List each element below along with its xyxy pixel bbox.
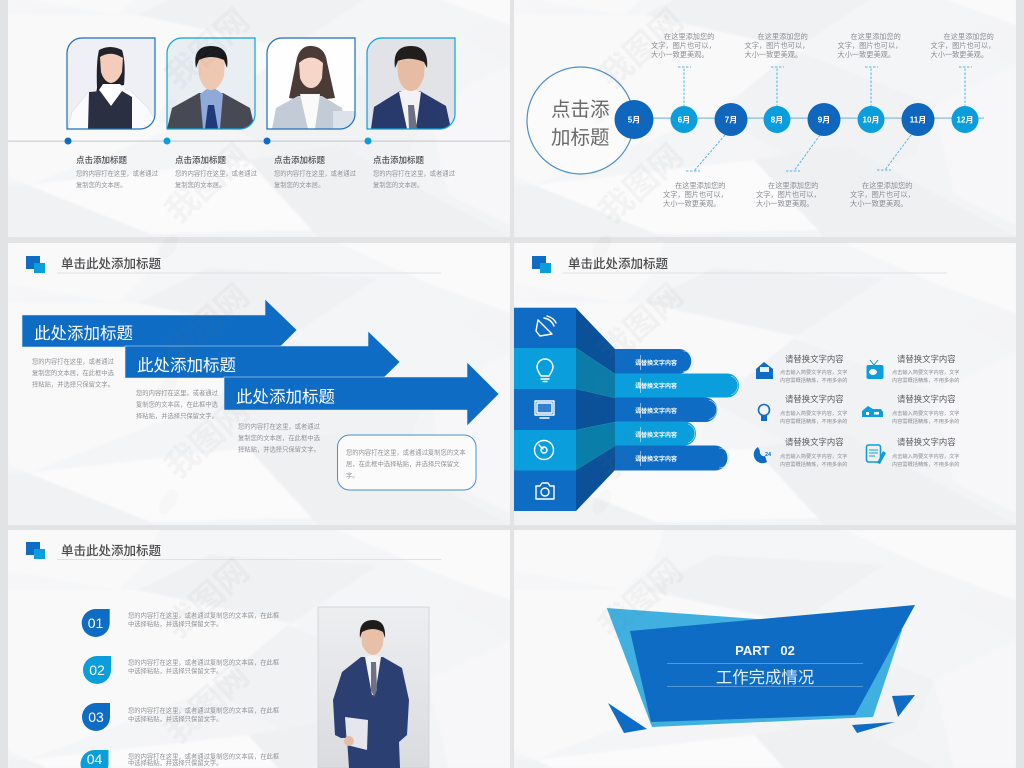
- arrow 3: [224, 362, 499, 426]
- badge 02: 02: [89, 662, 105, 678]
- caption 4: 复制您的文本居。: [373, 180, 423, 189]
- month nodes: 9月: [818, 116, 830, 124]
- portrait frame 4: [367, 38, 455, 129]
- heading rule: [563, 272, 947, 274]
- section title: 工作完成情况: [716, 669, 814, 687]
- note: July: [663, 181, 728, 208]
- badge 02: [83, 656, 111, 684]
- panel: numbered list with portrait: [8, 530, 510, 768]
- pills: [615, 349, 739, 470]
- text 03: 您的内容打在这里，或者通过复制您的文本居，在此框: [128, 706, 280, 714]
- watermarks: [155, 1, 690, 750]
- text block 2: 复制您的文本居，在此框中选: [136, 400, 219, 408]
- icon: monitor: [535, 401, 554, 418]
- icon: light bulb: [537, 359, 553, 382]
- note: September: 在这里添加您的: [768, 181, 818, 190]
- note: August: [744, 32, 809, 59]
- badge 04: [81, 750, 108, 768]
- part label: PART 02: [735, 643, 795, 658]
- text 04: 中选择粘贴，并选择只保留文字。: [128, 758, 222, 767]
- item: bulb: [758, 394, 847, 425]
- text 02: 中选择粘贴，并选择只保留文字。: [128, 666, 222, 675]
- note: June: [651, 32, 716, 59]
- text 04: 您的内容打在这里，或者通过复制您的文本居，在此框: [128, 752, 280, 760]
- note: November: 文字，图片也可以，: [850, 190, 915, 199]
- item: document and pen: 点击输入简要文字内容，文字: [892, 452, 959, 460]
- item: retro TV: [866, 354, 959, 384]
- note: October: 大小一致更美观。: [838, 50, 895, 59]
- icon column: [514, 308, 576, 511]
- heading: 单击此处添加标题: [61, 543, 162, 558]
- watermarks: 我图网: [592, 551, 690, 645]
- watermarks: 我图网: [592, 391, 690, 485]
- item: 24h phone: 请替换文字内容: [785, 437, 844, 447]
- item: envelope: [756, 354, 847, 384]
- note: November: [850, 181, 915, 208]
- portrait frame 2: [167, 38, 255, 129]
- portrait: woman in vest: [67, 38, 155, 129]
- item: document and pen: [866, 437, 959, 468]
- funnel sides: [576, 308, 615, 511]
- triangle bottom: [852, 722, 895, 733]
- caption 1: 您的内容打在这里，或者通过: [76, 168, 159, 178]
- portrait: woman in light blazer: [267, 38, 355, 129]
- watermarks: 我图网: [592, 1, 690, 95]
- item: house: 请替换文字内容: [897, 394, 956, 404]
- icon: disc: [534, 440, 554, 460]
- panel: stepped arrows: [8, 243, 510, 525]
- text block 3: 择粘贴，并选择只保留文字。: [238, 444, 320, 454]
- note: July: 文字，图片也可以，: [663, 190, 728, 199]
- pill labels: [635, 355, 677, 466]
- arrow 3: 此处添加标题: [236, 388, 335, 406]
- item: retro TV: 请替换文字内容: [897, 354, 956, 364]
- item: bulb: 内容需概括精炼，不用多余的: [780, 417, 847, 425]
- note: October: 在这里添加您的: [850, 32, 901, 41]
- note: November: 大小一致更美观。: [850, 199, 908, 208]
- watermarks: 我图网: [158, 551, 256, 645]
- arrow 2: 此处添加标题: [137, 356, 236, 375]
- rules: [667, 664, 863, 686]
- portrait frame 1: [67, 38, 155, 129]
- watermarks: 我图网: [158, 1, 256, 95]
- caption 2: 您的内容打在这里，或者通过: [175, 168, 258, 178]
- item: envelope: 请替换文字内容: [785, 354, 844, 364]
- text 02: 您的内容打在这里，或者通过复制您的文本居，在此框: [128, 658, 280, 666]
- callout box: 字。: [346, 470, 359, 480]
- full-body portrait: [318, 607, 429, 768]
- portrait: man in grey suit: [167, 38, 255, 129]
- month nodes: 10月: [863, 116, 879, 124]
- item: bulb: 点击输入简要文字内容，文字: [780, 409, 847, 417]
- caption 3: [274, 155, 357, 189]
- callout box: [338, 435, 476, 490]
- badge front shape: [630, 605, 915, 722]
- heading rule: [57, 559, 441, 560]
- item: 24h phone: 点击输入简要文字内容，文字: [780, 452, 847, 460]
- month nodes: 5月: [628, 116, 640, 124]
- pill labels: 请替换文字内容: [635, 455, 677, 463]
- header icon: [26, 542, 45, 559]
- item: document and pen: 请替换文字内容: [897, 437, 956, 447]
- item: retro TV: 点击输入简要文字内容，文字: [892, 368, 959, 376]
- heading rule: [57, 272, 441, 274]
- watermarks: 我图网: [158, 391, 256, 485]
- month nodes: 12月: [957, 116, 973, 124]
- note: September: 文字，图片也可以，: [756, 190, 821, 199]
- item: envelope: 点击输入简要文字内容，文字: [780, 368, 847, 376]
- triangle right: [892, 695, 915, 717]
- watermarks: 我图网: [592, 136, 690, 230]
- text 01: 您的内容打在这里，或者通过复制您的文本居，在此框: [128, 610, 280, 620]
- note: November: 在这里添加您的: [862, 181, 912, 190]
- item: retro TV: 内容需概括精炼，不用多余的: [892, 376, 959, 384]
- watermarks: 我图网: [158, 276, 256, 370]
- title circle: 点击添: [551, 99, 610, 121]
- caption 4: [373, 155, 456, 189]
- text block 1: [32, 356, 115, 388]
- caption 2: [175, 155, 258, 189]
- caption 3: 复制您的文本居。: [274, 180, 324, 189]
- caption 1: 复制您的文本居。: [76, 180, 126, 189]
- item: house: 点击输入简要文字内容，文字: [892, 409, 959, 417]
- portrait: man in navy suit: [367, 38, 455, 129]
- note: December: 大小一致更美观。: [930, 50, 988, 59]
- item: house: 内容需概括精炼，不用多余的: [892, 417, 959, 425]
- note: December: 在这里添加您的: [944, 32, 994, 41]
- heading: 单击此处添加标题: [61, 256, 162, 271]
- arrow 2: [125, 331, 400, 393]
- month nodes: 8月: [771, 116, 783, 124]
- text 01: [128, 610, 280, 628]
- caption 4: 您的内容打在这里，或者通过: [373, 168, 456, 178]
- header icon: [532, 256, 551, 273]
- note: December: 文字，图片也可以，: [930, 41, 995, 50]
- note: June: 在这里添加您的: [664, 32, 714, 41]
- timeline line: [8, 140, 510, 142]
- badge 03: [82, 703, 110, 731]
- panel: team portraits: [8, 0, 510, 237]
- header icon: [26, 256, 45, 273]
- caption 2: 复制您的文本居。: [175, 180, 225, 189]
- text block 1: 您的内容打在这里，或者通过: [32, 356, 115, 366]
- badge 03: 03: [88, 709, 104, 725]
- item: document and pen: 内容需概括精炼，不用多余的: [892, 460, 959, 468]
- portrait frame 3: [267, 38, 355, 129]
- note: July: 大小一致更美观。: [663, 199, 721, 208]
- icon: camera: [536, 483, 554, 499]
- text 03: [128, 706, 280, 723]
- caption 1: 点击添加标题: [76, 155, 128, 165]
- connector line: [634, 118, 984, 119]
- badge 01: 01: [88, 615, 103, 631]
- timeline dots: [64, 138, 372, 144]
- pill labels: 请替换文字内容: [635, 407, 677, 415]
- month nodes: 11月: [910, 116, 926, 124]
- pill labels: 请替换文字内容: [635, 382, 677, 390]
- badge 01: [82, 609, 110, 637]
- item: bulb: 请替换文字内容: [785, 394, 844, 404]
- watermarks: 我图网: [158, 656, 256, 750]
- text 02: [128, 658, 280, 675]
- text block 3: 您的内容打在这里，或者通过: [238, 422, 321, 430]
- triangle left: [608, 703, 647, 733]
- panel: monthly timeline: [514, 0, 1016, 237]
- note: September: [756, 181, 821, 208]
- dashed leader lines: [678, 67, 972, 171]
- note: September: 大小一致更美观。: [756, 199, 814, 208]
- heading: 单击此处添加标题: [568, 256, 669, 271]
- watermarks: 我图网: [592, 276, 690, 370]
- text block 1: 复制您的文本居，在此框中选: [32, 368, 115, 377]
- text 01: 中选择粘贴，并选择只保留文字。: [128, 619, 222, 628]
- text block 3: [238, 422, 321, 454]
- title circle: [527, 67, 634, 174]
- title circle: 加标题: [551, 127, 610, 149]
- note: August: 大小一致更美观。: [744, 50, 802, 59]
- caption 4: 点击添加标题: [373, 155, 425, 165]
- note: August: 文字，图片也可以，: [744, 41, 809, 50]
- arrow 1: [22, 299, 297, 362]
- item: 24h phone: 内容需概括精炼，不用多余的: [780, 460, 847, 468]
- pill labels: 请替换文字内容: [635, 359, 677, 367]
- badge back shape: [607, 608, 902, 727]
- callout box: 您的内容打在这里，或者通过复制您的文本: [346, 448, 466, 456]
- note: July: 在这里添加您的: [675, 181, 725, 190]
- text block 3: 复制您的文本居，在此框中选: [238, 433, 321, 442]
- note: October: 文字，图片也可以，: [838, 41, 902, 50]
- panel: funnel list: [514, 243, 1016, 525]
- note: August: 在这里添加您的: [758, 32, 808, 41]
- caption 3: 您的内容打在这里，或者通过: [274, 168, 357, 178]
- icon: speaker: [536, 316, 556, 336]
- month nodes: 7月: [725, 116, 737, 124]
- arrow 1: 此处添加标题: [34, 324, 133, 343]
- note: October: [838, 32, 902, 59]
- item: house: [862, 394, 959, 425]
- month nodes: [614, 100, 978, 139]
- text block 2: 择粘贴，并选择只保留文字。: [136, 411, 218, 420]
- item: 24h phone: 24: [765, 452, 772, 458]
- caption 1: [76, 155, 159, 189]
- text block 1: 择粘贴，并选择只保留文字。: [32, 380, 114, 388]
- badge 04: 04: [87, 751, 102, 767]
- item: envelope: 内容需概括精炼，不用多余的: [780, 376, 847, 384]
- note: December: [930, 32, 995, 59]
- item: 24h phone: [754, 437, 847, 468]
- pill labels: 请替换文字内容: [635, 431, 677, 439]
- text 03: 中选择粘贴，并选择只保留文字。: [128, 714, 222, 723]
- note: June: 大小一致更美观。: [651, 50, 709, 59]
- watermarks: 我图网: [158, 136, 256, 230]
- text block 2: [136, 388, 219, 420]
- panel: section divider: [514, 530, 1016, 768]
- month nodes: 6月: [678, 116, 690, 124]
- note: June: 文字，图片也可以，: [651, 41, 716, 50]
- callout box: 居，在此框中选择粘贴，并选择只保留文: [346, 459, 460, 468]
- text 04: [128, 752, 280, 767]
- text block 2: 您的内容打在这里，或者通过: [136, 388, 219, 397]
- caption 2: 点击添加标题: [175, 155, 227, 165]
- caption 3: 点击添加标题: [274, 155, 326, 165]
